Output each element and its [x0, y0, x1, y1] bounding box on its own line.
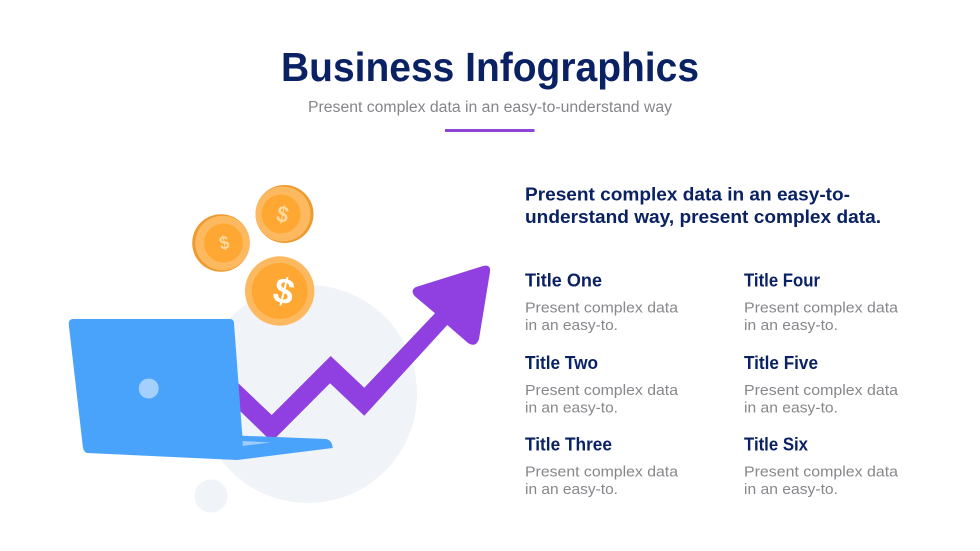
- item: Title Six: in an easy-to.: [744, 481, 838, 498]
- intro heading: understand way, present complex data.: [525, 206, 881, 227]
- item: Title Four: Present complex data: [744, 300, 899, 316]
- icon: coin left: $: [217, 232, 231, 254]
- subtitle: Present complex data in an easy-to-understand way: [308, 99, 672, 116]
- laptop logo dot: [139, 378, 159, 398]
- title: Business Infographics: [281, 44, 699, 90]
- icon: coin large: $: [269, 269, 299, 313]
- icon: coin left: [192, 214, 250, 272]
- growth arrow: [238, 266, 490, 442]
- intro heading: Present complex data in an easy-to-: [525, 184, 850, 204]
- item: Title Five: [744, 353, 899, 416]
- item: Title Six: Present complex data: [744, 464, 899, 480]
- item: Title Six: [744, 434, 899, 498]
- item: Title Two: [525, 353, 679, 416]
- icon: coin top: [256, 185, 314, 243]
- item: Title Four: in an easy-to.: [744, 317, 838, 334]
- item: Title Five: in an easy-to.: [744, 400, 838, 416]
- item: Title Three: Title Three: [525, 434, 612, 454]
- item: Title Five: Title Five: [744, 353, 818, 373]
- item: Title Six: Title Six: [744, 434, 808, 454]
- item: Title Three: Present complex data: [525, 464, 679, 480]
- laptop screen: [69, 319, 243, 460]
- icon: coin large: [245, 256, 314, 326]
- item: Title Two: in an easy-to.: [525, 400, 618, 416]
- item: Title Five: Present complex data: [744, 382, 899, 399]
- intro heading: [525, 184, 881, 227]
- item: Title Three: [525, 434, 679, 498]
- item: Title Four: Title Four: [744, 270, 820, 290]
- item: Title One: Present complex data: [525, 300, 679, 316]
- background small circle: [194, 480, 228, 512]
- item: Title Two: Present complex data: [525, 382, 679, 399]
- icon: coin top: $: [274, 200, 291, 228]
- item: Title One: Title One: [525, 270, 602, 290]
- item: Title One: in an easy-to.: [525, 317, 618, 334]
- item: Title Four: [744, 270, 899, 334]
- item: Title Two: Title Two: [525, 353, 598, 373]
- item: Title One: [525, 270, 679, 334]
- item: Title Three: in an easy-to.: [525, 481, 618, 498]
- illustration: laptop with growth arrow and coins: [69, 185, 490, 512]
- accent rule: [445, 129, 534, 132]
- background large circle: [199, 285, 417, 503]
- laptop base: [230, 436, 333, 460]
- laptop keyboard highlight: [242, 441, 271, 446]
